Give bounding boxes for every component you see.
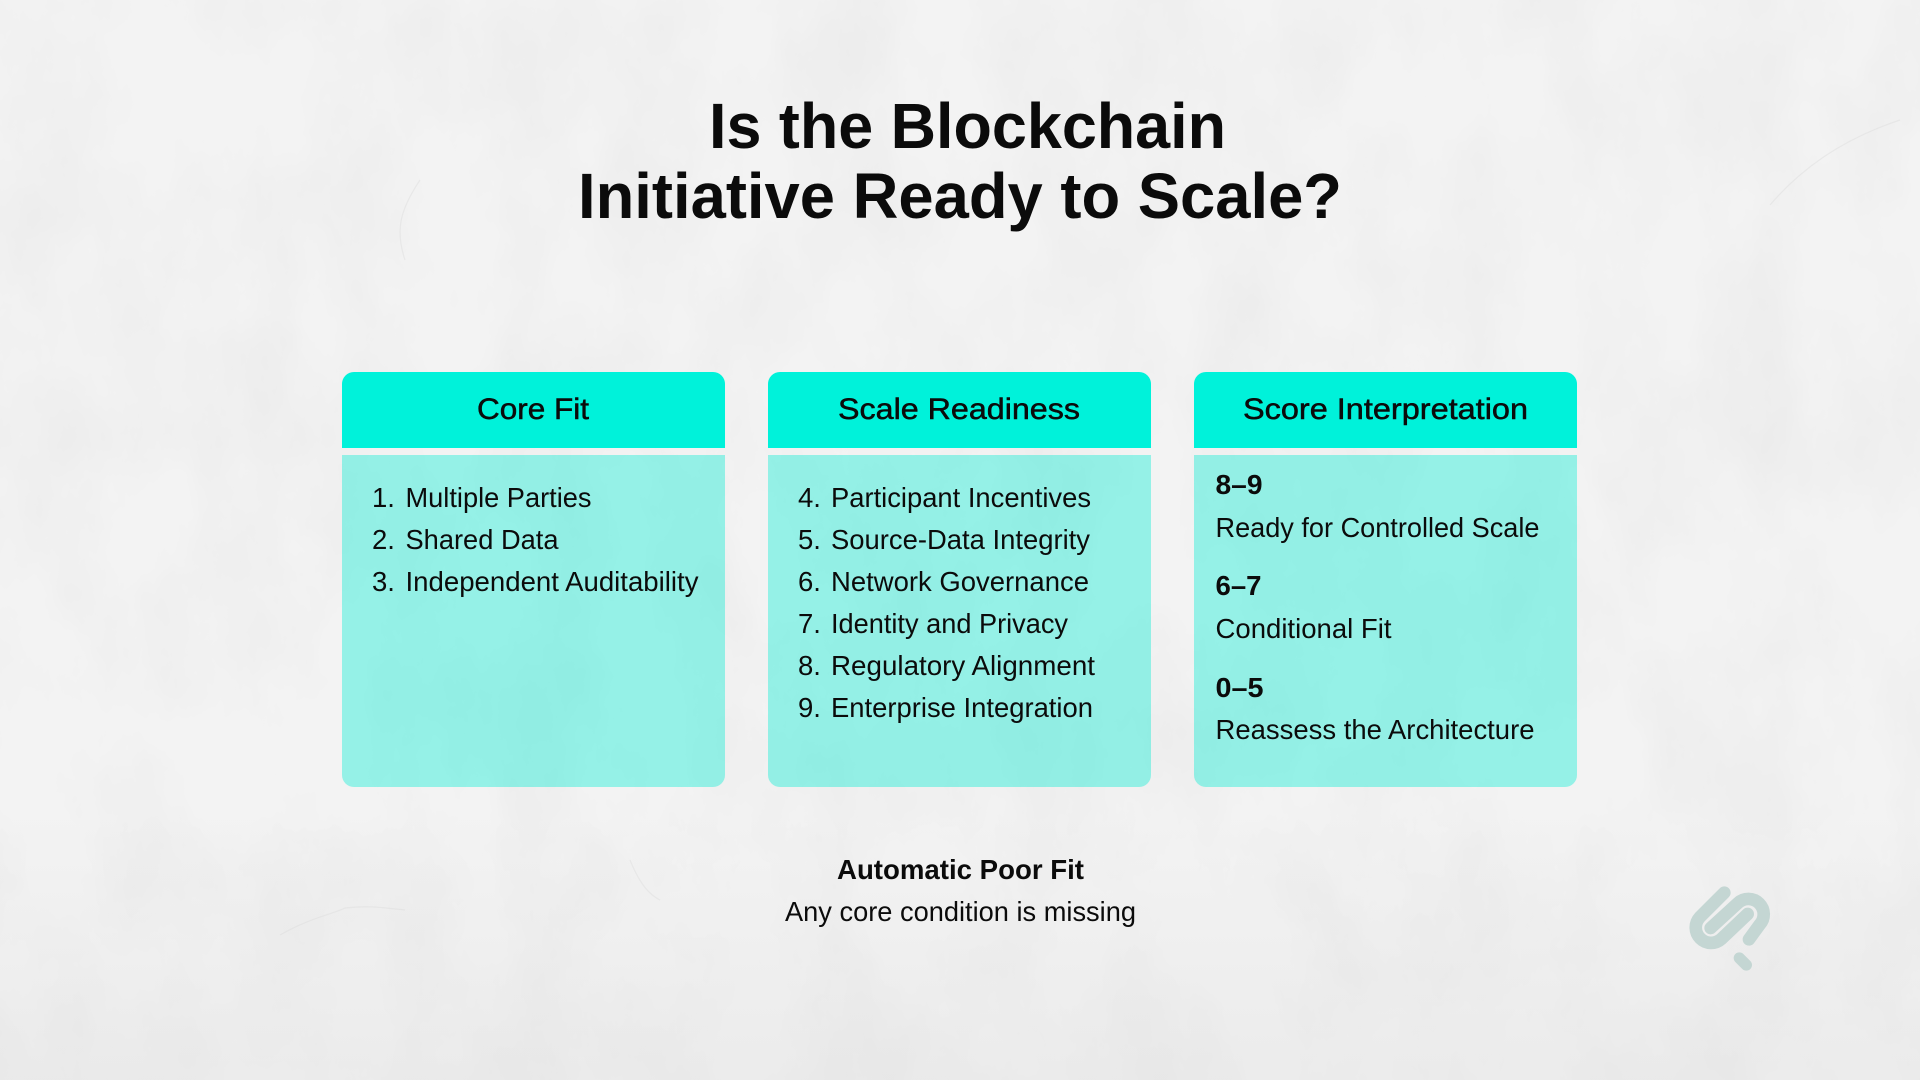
- callout: automatic poor fit: Any core condition is missing: [785, 896, 1136, 927]
- scale readiness header: Scale Readiness: [838, 393, 1080, 426]
- title: Is the Blockchain: [709, 90, 1226, 162]
- scale readiness list: Source-Data Integrity: [831, 524, 1090, 555]
- core fit list: 2.: [372, 524, 395, 555]
- scale readiness list: Enterprise Integration: [831, 692, 1093, 723]
- core fit header: [342, 372, 725, 448]
- scale readiness list: Participant Incentives: [831, 482, 1091, 513]
- title: Initiative Ready to Scale?: [578, 160, 1342, 232]
- core fit list: 3.: [372, 566, 395, 597]
- scale readiness list: Network Governance: [831, 566, 1089, 597]
- core fit list: Independent Auditability: [406, 566, 699, 597]
- scale readiness body: [768, 455, 1151, 787]
- score interpretation header: Score Interpretation: [1243, 393, 1528, 426]
- score band: 8–9: [1216, 469, 1540, 543]
- panel: score interpretation: [1194, 372, 1577, 787]
- score band: 0–5: [1216, 672, 1534, 745]
- scale readiness list: Identity and Privacy: [831, 608, 1068, 639]
- scale readiness list: 9.: [798, 692, 821, 723]
- scale readiness header: [768, 372, 1151, 448]
- score band: 8–9: 8–9: [1216, 469, 1262, 500]
- icon: logo: [1696, 893, 1764, 965]
- scale readiness list: 6.: [798, 566, 821, 597]
- score band: 6–7: Conditional Fit: [1216, 613, 1392, 644]
- score band: 0–5: 0–5: [1216, 672, 1264, 703]
- score band: 6–7: 6–7: [1216, 570, 1262, 601]
- scale readiness list: 5.: [798, 524, 821, 555]
- scale readiness list: 8.: [798, 650, 821, 681]
- core fit list: [372, 482, 699, 597]
- core fit body: [342, 455, 725, 787]
- callout: automatic poor fit: [785, 854, 1136, 927]
- core fit list: Shared Data: [406, 524, 559, 555]
- core fit list: 1.: [372, 482, 395, 513]
- scale readiness list: 7.: [798, 608, 821, 639]
- panel: core fit: [342, 372, 725, 787]
- score interpretation body: [1194, 455, 1577, 787]
- title: [578, 90, 1342, 232]
- core fit list: Multiple Parties: [406, 482, 592, 513]
- core fit header: Core Fit: [477, 393, 590, 426]
- scale readiness list: Regulatory Alignment: [831, 650, 1095, 681]
- score band: 6–7: [1216, 570, 1392, 644]
- scale readiness list: 4.: [798, 482, 821, 513]
- panel: scale readiness: [768, 372, 1151, 787]
- callout: automatic poor fit: Automatic Poor Fit: [837, 854, 1084, 885]
- scale readiness list: [798, 482, 1095, 723]
- score band: 8–9: Ready for Controlled Scale: [1216, 512, 1540, 543]
- score interpretation header: [1194, 372, 1577, 448]
- score band: 0–5: Reassess the Architecture: [1216, 714, 1534, 745]
